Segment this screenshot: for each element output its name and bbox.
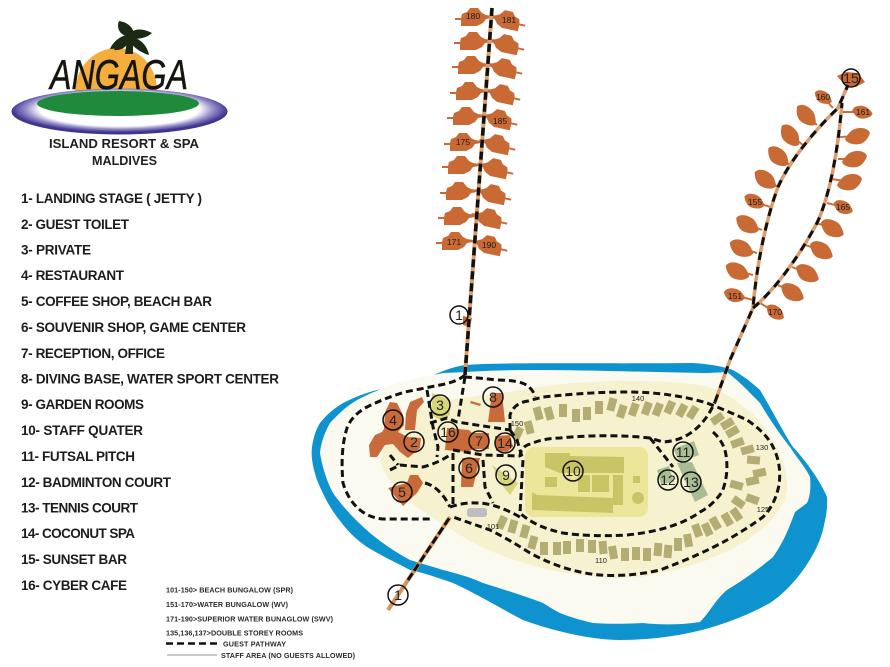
island room numbers: 125 bbox=[757, 505, 769, 514]
facility list: 12- BADMINTON COURT bbox=[21, 475, 172, 490]
island room numbers: 110 bbox=[595, 556, 607, 565]
legend: GUEST PATHWAY bbox=[223, 640, 286, 648]
logo location: MALDIVES bbox=[92, 153, 157, 168]
island map bbox=[312, 363, 827, 640]
numbered location markers: 7 bbox=[475, 433, 483, 449]
logo bbox=[12, 21, 228, 168]
island room numbers: 150 bbox=[511, 419, 523, 428]
island sand bbox=[320, 370, 810, 624]
logo ring bbox=[12, 88, 228, 134]
facility list: 7- RECEPTION, OFFICE bbox=[21, 346, 165, 361]
facility list: 2- GUEST TOILET bbox=[21, 217, 130, 232]
numbered location markers: 4 bbox=[389, 412, 397, 428]
island room numbers: 130 bbox=[756, 443, 768, 452]
north room numbers: 175 bbox=[456, 137, 470, 147]
resort yellow zone bbox=[380, 381, 787, 578]
east room numbers: 165 bbox=[836, 202, 850, 212]
north walkway bbox=[465, 8, 492, 375]
numbered location markers bbox=[383, 69, 860, 605]
numbered location markers: 1 bbox=[394, 587, 402, 603]
facility list: 5- COFFEE SHOP, BEACH BAR bbox=[21, 294, 212, 309]
tennis court bbox=[677, 462, 708, 502]
connecting stems bbox=[734, 97, 862, 312]
legend: 101-150> BEACH BUNGALOW (SPR) bbox=[166, 586, 294, 594]
facility list: 16- CYBER CAFE bbox=[21, 578, 127, 593]
legend: STAFF AREA (NO GUESTS ALLOWED) bbox=[221, 651, 356, 660]
legend: guest pathway sample bbox=[166, 642, 220, 645]
east room numbers: 160 bbox=[816, 92, 830, 102]
facility list: 11- FUTSAL PITCH bbox=[21, 449, 135, 464]
east room numbers: 170 bbox=[768, 307, 782, 317]
futsal pitch bbox=[673, 441, 699, 462]
legend: 151-170>WATER BUNGALOW (WV) bbox=[166, 600, 289, 609]
sports courts bbox=[657, 441, 708, 502]
numbered location markers: 16 bbox=[440, 424, 456, 440]
logo island bbox=[37, 91, 199, 116]
north room numbers: 190 bbox=[482, 240, 496, 250]
north room numbers: 180 bbox=[466, 11, 480, 21]
facility list: 9- GARDEN ROOMS bbox=[21, 397, 144, 412]
numbered location markers: 5 bbox=[398, 484, 406, 500]
east walkway bbox=[715, 85, 848, 402]
facility list: 4- RESTAURANT bbox=[21, 268, 125, 283]
numbered location markers: 3 bbox=[436, 397, 444, 413]
logo palm tree bbox=[110, 21, 152, 55]
numbered location markers: 10 bbox=[565, 463, 581, 479]
badminton court bbox=[657, 466, 674, 484]
legend: staff area sample bbox=[167, 654, 217, 656]
south jetty bbox=[388, 517, 450, 610]
facility list: 8- DIVING BASE, WATER SPORT CENTER bbox=[21, 372, 279, 386]
hut row right bbox=[470, 7, 527, 258]
numbered location markers: 2 bbox=[410, 434, 418, 450]
north room numbers: 181 bbox=[502, 15, 516, 25]
facility list: 3- PRIVATE bbox=[21, 242, 91, 258]
staff quarter buildings bbox=[532, 453, 644, 513]
facility list bbox=[21, 191, 279, 593]
resort buildings bbox=[369, 393, 513, 506]
island room numbers: 101 bbox=[487, 522, 499, 531]
right column huts bbox=[764, 105, 873, 322]
north room numbers: 185 bbox=[493, 116, 507, 126]
east room numbers: 151 bbox=[728, 291, 742, 301]
facility list: 1- LANDING STAGE ( JETTY ) bbox=[21, 191, 202, 206]
logo subtitle: ISLAND RESORT & SPA bbox=[49, 136, 200, 151]
facility list: 14- COCONUT SPA bbox=[21, 526, 135, 541]
logo wordmark: ANGAGA bbox=[48, 51, 188, 98]
numbered location markers: 9 bbox=[502, 467, 510, 483]
north room numbers: 171 bbox=[447, 237, 461, 247]
left column huts bbox=[724, 89, 834, 302]
legend: 171-190>SUPERIOR WATER BUNAGLOW (SWV) bbox=[166, 614, 334, 624]
east water bungalows bbox=[715, 72, 873, 402]
numbered location markers: 6 bbox=[465, 460, 473, 476]
numbered location markers: 8 bbox=[489, 389, 497, 405]
legend bbox=[166, 586, 356, 660]
lagoon ring bbox=[312, 363, 827, 640]
north room numbers bbox=[447, 11, 516, 250]
numbered location markers: 11 bbox=[676, 444, 690, 460]
parking bbox=[467, 508, 487, 517]
facility list: 10- STAFF QUATER bbox=[21, 423, 143, 438]
sunset bar bbox=[837, 72, 865, 87]
numbered location markers: 1 bbox=[455, 307, 463, 323]
numbered location markers: 14 bbox=[497, 435, 513, 451]
north walkway and superior water bungalows bbox=[436, 7, 527, 375]
beach bungalows bbox=[495, 397, 767, 561]
garden rooms and private bbox=[432, 393, 518, 495]
east room numbers: 161 bbox=[856, 107, 870, 117]
facility list: 6- SOUVENIR SHOP, GAME CENTER bbox=[21, 320, 246, 335]
facility list: 13- TENNIS COURT bbox=[21, 500, 139, 516]
landing stage marker hut bbox=[463, 316, 472, 327]
hut row left bbox=[436, 8, 492, 250]
island room numbers bbox=[487, 394, 769, 565]
east room numbers: 155 bbox=[748, 197, 762, 207]
numbered location markers: 15 bbox=[843, 70, 859, 86]
facility list: 15- SUNSET BAR bbox=[21, 552, 127, 567]
staff area plot bbox=[525, 447, 648, 517]
legend: 135,136,137>DOUBLE STOREY ROOMS bbox=[166, 628, 303, 638]
guest pathways bbox=[342, 375, 780, 575]
east room numbers bbox=[728, 92, 870, 317]
logo sun bbox=[75, 48, 157, 91]
island room numbers: 140 bbox=[632, 394, 644, 403]
numbered location markers: 12 bbox=[660, 472, 676, 488]
numbered location markers: 13 bbox=[683, 474, 699, 490]
